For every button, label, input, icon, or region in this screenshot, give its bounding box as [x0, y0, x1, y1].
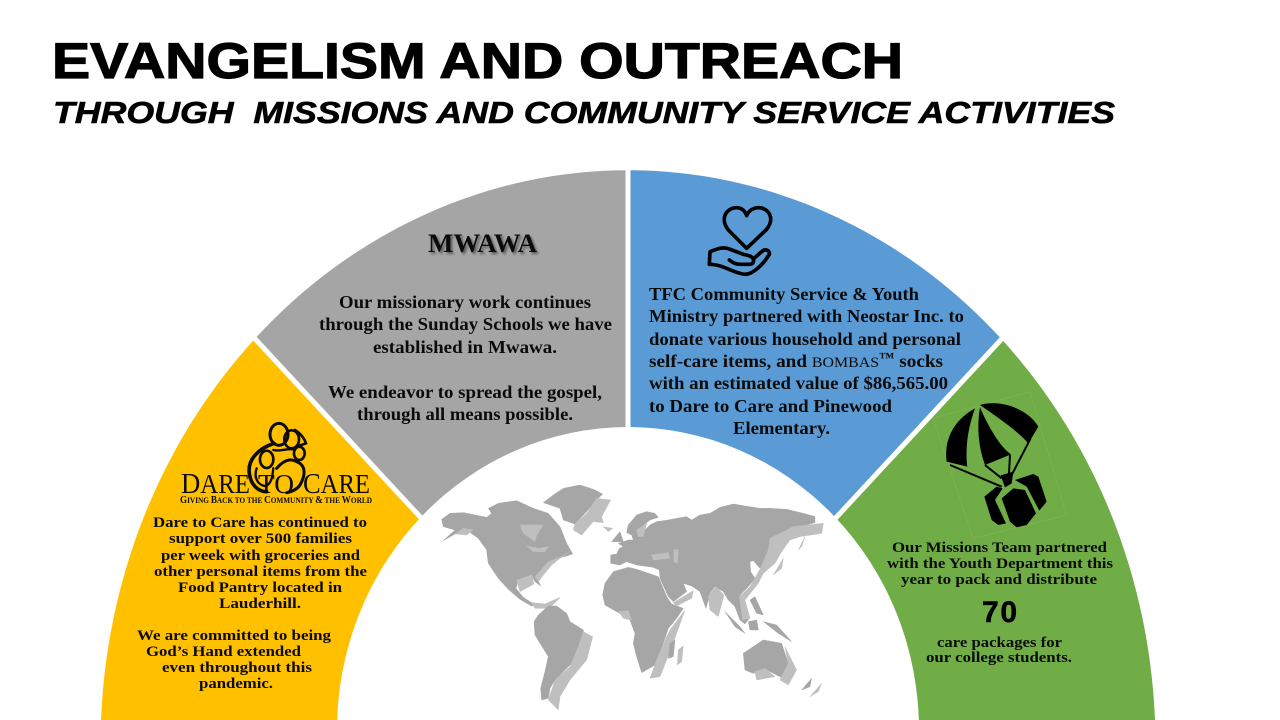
subtitle: THROUGH MISSIONS AND COMMUNITY SERVICE ACTIVITIES	[53, 96, 1116, 130]
South America	[534, 606, 583, 700]
text: Dare to Care description: support over 500 families	[169, 531, 352, 547]
panel: Dare to Care	[101, 340, 419, 720]
Australia	[743, 640, 788, 678]
text: missions team intro	[887, 540, 1113, 588]
brand name: DARE	[181, 468, 254, 500]
text: missions team closing: care packages for	[937, 635, 1062, 651]
panel: community service	[630, 170, 1000, 516]
text: MWAWA description: through the Sunday Schools we have	[319, 314, 612, 334]
brand name: CARE	[303, 468, 375, 500]
text: MWAWA description: We endeavor to spread the gospel,	[328, 382, 602, 402]
world map	[442, 485, 823, 710]
brand name: TO	[258, 469, 294, 499]
icon: heart in hand	[709, 208, 771, 274]
text: Dare to Care description: per week with groceries and	[161, 548, 361, 564]
text: community service description: with an estimated value of $86,565.00	[649, 373, 948, 393]
text: Dare to Care description: other personal items from the	[154, 564, 367, 580]
text: community service description: TFC Community Service & Youth	[649, 284, 919, 304]
Eurasia	[611, 504, 815, 624]
North America	[442, 501, 573, 606]
text: missions team intro: year to pack and distribute	[901, 572, 1097, 588]
icon: family emblem	[249, 423, 306, 493]
text: community service description: donate various household and personal	[649, 329, 961, 349]
text: Dare to Care description: Dare to Care has continued to	[153, 515, 367, 531]
text: community service description: to Dare to Care and Pinewood	[649, 396, 892, 416]
text: community service description: self-care items, and BOMBAS	[649, 351, 873, 371]
heading: MWAWA: MWAWA	[428, 229, 537, 258]
icon: parachute with packages	[933, 392, 1067, 538]
number: 70: 70	[982, 596, 1017, 629]
text: missions team closing	[926, 635, 1072, 666]
title: EVANGELISM AND OUTREACH	[52, 32, 903, 89]
Africa	[603, 567, 683, 673]
logo: Dare to Care	[180, 423, 372, 506]
text: Dare to Care description: even throughout this	[162, 660, 312, 676]
text: Dare to Care description: Lauderhill.	[219, 596, 301, 612]
text: MWAWA description: Our missionary work continues	[339, 292, 591, 312]
text: MWAWA description: established in Mwawa.	[373, 337, 557, 357]
text: Dare to Care description: pandemic.	[199, 676, 273, 692]
text: Dare to Care description	[137, 515, 367, 692]
text: community service description: Ministry partnered with Neostar Inc. to	[649, 306, 964, 326]
text: MWAWA description	[319, 292, 612, 424]
text: missions team intro: with the Youth Department this	[887, 556, 1113, 572]
panel: MWAWA	[256, 170, 626, 516]
text: community service description: Elementary.	[733, 418, 830, 438]
text: Dare to Care description: Food Pantry located in	[178, 580, 343, 596]
Indonesia and islands	[725, 597, 792, 642]
text: Dare to Care description: God’s Hand extended	[146, 644, 302, 660]
text: missions team closing: our college students.	[926, 650, 1072, 666]
Greenland	[543, 485, 603, 524]
text: community service description: ™	[879, 351, 894, 366]
text: Dare to Care description: We are committed to being	[137, 628, 332, 644]
text: community service description	[649, 284, 964, 438]
text: community service description: socks	[894, 351, 943, 371]
text: MWAWA description: through all means possible.	[357, 404, 573, 424]
tagline: GIVING BACK TO THE COMMUNITY & THE WORLD	[180, 495, 372, 506]
panel: missions team	[838, 341, 1155, 720]
text: missions team intro: Our Missions Team partnered	[892, 540, 1108, 556]
